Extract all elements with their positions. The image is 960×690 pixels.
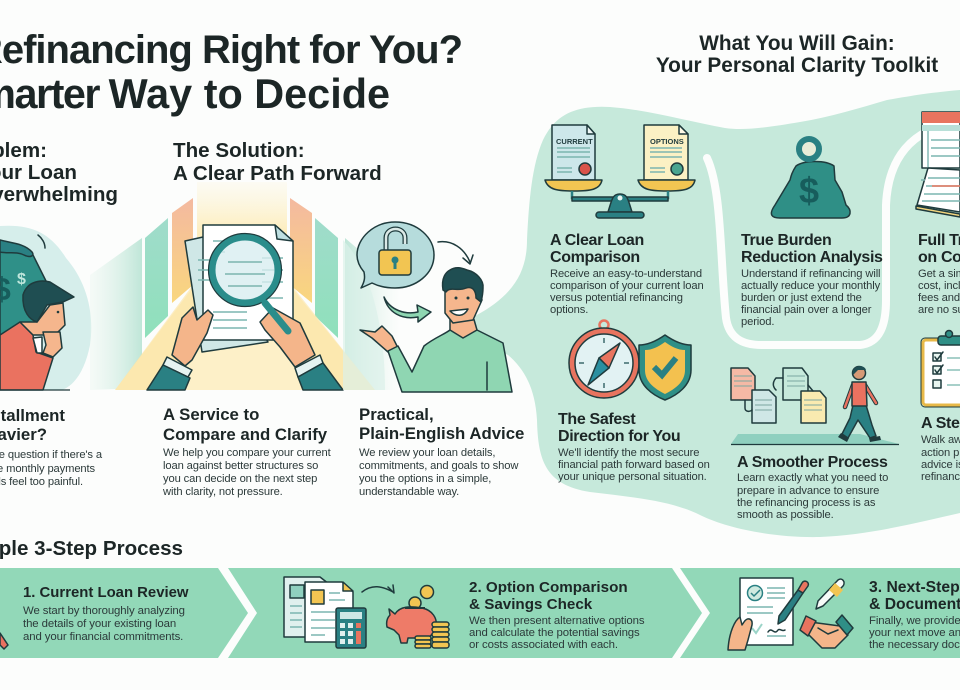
text: practical advice: understandable way.	[359, 486, 459, 498]
text: service to compare: Compare and Clarify	[163, 425, 328, 444]
illustration: left hand and sleeve	[147, 307, 213, 390]
text: option comparison: We then present alternative options	[469, 615, 645, 627]
text: safest direction: We'll identify the most secure	[558, 447, 699, 459]
text: option comparison: & Savings Check	[469, 596, 593, 613]
text: true burden reduction: period.	[741, 316, 774, 328]
panel: step 1	[0, 568, 248, 658]
text: current loan review: and your financial commitments.	[23, 631, 183, 643]
panel: step 2	[228, 568, 702, 658]
panel: the problem	[0, 139, 118, 488]
text: option comparison: and calculate the potential savings	[469, 627, 640, 639]
text: clear loan comparison: A Clear Loan	[550, 232, 644, 249]
text: full transparency	[918, 232, 960, 316]
heading: the solution: The Solution:	[173, 139, 305, 162]
card: safest direction	[558, 320, 710, 483]
text: clear loan comparison: versus potential refinancing	[550, 292, 683, 304]
text: installment question	[0, 406, 103, 488]
text: option comparison	[469, 579, 645, 651]
text: practical advice: Practical,	[359, 405, 434, 424]
text: true burden reduction: True Burden	[741, 232, 831, 249]
text: true burden reduction	[741, 232, 883, 328]
illustration: document under magnifying glass	[185, 225, 293, 352]
text: smoother process: the refinancing process is as	[737, 497, 876, 509]
icon: shield with check	[639, 335, 691, 400]
text: practical advice: commitments, and goals to show	[359, 460, 519, 472]
icon: balance scale with documents: OPTIONS	[650, 137, 684, 146]
chevron: step 3	[680, 568, 960, 658]
text: safest direction: The Safest	[558, 411, 636, 428]
card: clear loan comparison	[545, 125, 704, 316]
text: safest direction: Direction for You	[558, 428, 680, 445]
icon: spreadsheet packet	[916, 112, 960, 217]
text: true burden reduction: burden or just extend the	[741, 292, 862, 304]
text: true burden reduction: Understand if refinancing will	[741, 268, 880, 280]
icon: compass	[569, 320, 639, 398]
text: clear loan comparison: comparison of your current loan	[550, 280, 704, 292]
panel: step 3	[680, 568, 960, 658]
text: smoother process: Learn exactly what you need to	[737, 472, 888, 484]
text: step-by-step plan	[921, 415, 960, 483]
icon: pen	[816, 579, 844, 609]
icon: checklist clipboard	[921, 330, 960, 407]
text: safest direction: financial path forward based on	[558, 459, 710, 471]
card: full transparency	[916, 112, 960, 316]
heading: what you will gain: Your Personal Clarity Toolkit	[656, 54, 938, 77]
icon: piggy bank and coins	[387, 586, 449, 648]
text: current loan review: 1. Current Loan Review	[23, 585, 189, 601]
icon: balance scale with documents: CURRENT	[556, 137, 593, 146]
text: practical advice: We review your loan details,	[359, 447, 495, 459]
icon: documents and calculator	[284, 577, 366, 648]
text: true burden reduction: financial pain over a longer	[741, 304, 872, 316]
card: true burden reduction	[741, 139, 883, 328]
heading: what you will gain: What You Will Gain:	[699, 32, 895, 55]
illustration: worried man with money bag: $	[17, 271, 26, 288]
icon: cropped pencil end	[0, 633, 8, 649]
heading: the solution: A Clear Path Forward	[173, 162, 382, 185]
text: clear loan comparison: Receive an easy-to-understand	[550, 268, 702, 280]
text: smoother process	[737, 454, 888, 521]
text: smoother process: smooth as possible.	[737, 509, 834, 521]
text: current loan review: the details of your existing loan	[23, 618, 176, 630]
text: option comparison: 2. Option Comparison	[469, 579, 628, 596]
illustration: advisor with open lock bubble	[343, 222, 512, 392]
illustration: corridor backdrop	[90, 182, 400, 390]
text: practical advice	[359, 405, 524, 498]
icon: money weight: $	[799, 170, 819, 211]
panel: the solution	[90, 139, 400, 498]
chevron: step 2	[228, 568, 702, 658]
text: practical advice: you the options in a simple,	[359, 473, 491, 485]
icon: balance scale with documents	[545, 125, 695, 218]
text: next-step plan	[869, 579, 960, 651]
text: true burden reduction: actually reduce your monthly	[741, 280, 881, 292]
text: smoother process: A Smoother Process	[737, 454, 888, 471]
text: service to compare: you can decide on the next step	[163, 473, 317, 485]
illustration: documents and walking person	[731, 366, 899, 444]
text: clear loan comparison: Comparison	[550, 249, 640, 266]
heading: the problem	[0, 139, 118, 206]
text: service to compare: with clarity, not pressure.	[162, 486, 283, 498]
text: service to compare	[162, 405, 332, 498]
title: Way to Decide	[109, 71, 390, 117]
icon: money weight	[771, 139, 850, 218]
title	[0, 28, 462, 117]
illustration: right hand, sleeve and magnifier handle	[260, 303, 343, 390]
card: smoother process	[731, 366, 899, 521]
card: step-by-step plan	[921, 330, 960, 483]
text: smoother process: prepare in advance to ensure	[737, 485, 879, 497]
arrow: to piggy bank	[362, 585, 394, 593]
text: safest direction: your unique personal situation.	[558, 471, 707, 483]
panel: toolkit background blob	[475, 90, 960, 537]
text: practical advice: Plain-English Advice	[359, 424, 524, 443]
text: clear loan comparison: options.	[550, 304, 588, 316]
illustration: worried man with money bag	[0, 226, 91, 390]
panel: practical advice	[343, 222, 524, 498]
text: service to compare: A Service to	[163, 405, 259, 424]
text: current loan review: We start by thoroughly analyzing	[23, 605, 185, 617]
chevron: step 1	[0, 568, 248, 658]
heading: the solution	[173, 139, 382, 185]
icon: signed document and pen	[728, 578, 808, 650]
text: clear loan comparison	[550, 232, 704, 316]
text: current loan review	[23, 585, 189, 643]
icon: handshake	[800, 615, 853, 648]
heading: what you will gain	[656, 32, 938, 77]
text: service to compare: We help you compare your current	[163, 447, 332, 459]
text: true burden reduction: Reduction Analysis	[741, 249, 883, 266]
text: option comparison: or costs associated with each.	[469, 639, 618, 651]
text: safest direction	[558, 411, 710, 483]
text: service to compare: loan against better structures so	[163, 460, 318, 472]
